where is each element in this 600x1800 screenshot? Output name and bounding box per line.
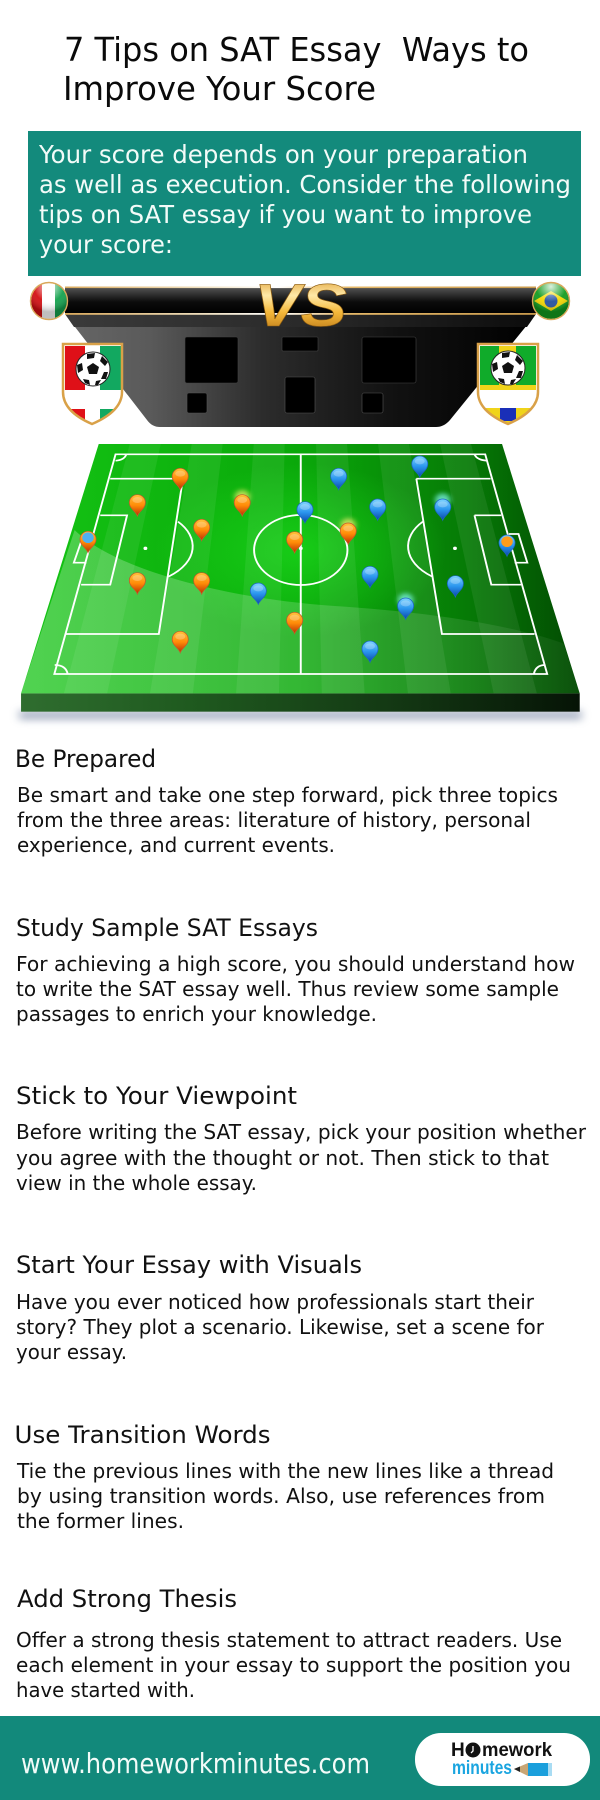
title: 7 Tips on SAT Essay Ways to (64, 30, 529, 69)
tip 6: Add Strong Thesis: each element in your essay to support the position you (16, 1653, 571, 1677)
tip 4: Start Your Essay with Visuals: your essay. (16, 1340, 127, 1364)
pin glows (235, 490, 450, 607)
intro panel: your score: (39, 230, 173, 259)
tip 2: Study Sample SAT Essays (16, 914, 575, 1026)
icon: Brazil shield (478, 344, 538, 426)
logo: Homework Minutes (415, 1733, 590, 1786)
tip 5: Use Transition Words: Tie the previous lines with the new lines like a thread (16, 1459, 554, 1483)
blue team pins (250, 456, 463, 662)
icon: Italy shield (63, 344, 122, 425)
tip 4: Start Your Essay with Visuals: Have you ever noticed how professionals start their (16, 1290, 535, 1314)
icon: Brazil flag (532, 282, 570, 320)
footer band (0, 1716, 600, 1800)
website address: www.homeworkminutes.com (21, 1747, 370, 1780)
title: Improve Your Score (63, 69, 376, 108)
tip 5: Use Transition Words (14, 1421, 554, 1533)
logo: Homework Minutes: mework (482, 1740, 552, 1761)
VS emblem: VS (254, 272, 347, 339)
tip 3: Stick to Your Viewpoint: you agree with the thought or not. Then stick to that (16, 1146, 549, 1170)
tip 6: Add Strong Thesis (16, 1585, 571, 1702)
orange team pins (129, 468, 356, 653)
tip 1: Be Prepared: Be Prepared (15, 745, 156, 773)
tip 5: Use Transition Words: Use Transition Words (14, 1421, 270, 1449)
pitch surface (21, 444, 580, 693)
tip 3: Stick to Your Viewpoint: Stick to Your Viewpoint (16, 1082, 297, 1110)
tip 5: Use Transition Words: the former lines. (17, 1509, 184, 1533)
tip 3: Stick to Your Viewpoint (16, 1082, 587, 1195)
tip 1: Be Prepared: from the three areas: literature of history, personal (17, 808, 531, 832)
title (63, 30, 529, 108)
intro panel: Your score depends on your preparation (38, 140, 528, 169)
pitch shadow (19, 709, 582, 721)
tip 2: Study Sample SAT Essays: to write the SAT essay well. Thus review some sample (16, 977, 559, 1001)
tip 3: Stick to Your Viewpoint: Before writing the SAT essay, pick your position whether (16, 1120, 587, 1144)
tip 4: Start Your Essay with Visuals: Start Your Essay with Visuals (16, 1251, 362, 1279)
tip 2: Study Sample SAT Essays: passages to enrich your knowledge. (16, 1002, 377, 1026)
top bar (65, 286, 536, 315)
intro panel (28, 131, 581, 276)
tip 4: Start Your Essay with Visuals (16, 1251, 545, 1364)
tip 1: Be Prepared: Be smart and take one step forward, pick three topics (17, 783, 558, 807)
intro panel: as well as execution. Consider the following (39, 170, 571, 199)
logo: Homework Minutes: o (467, 1740, 479, 1761)
goalkeeper pins (80, 531, 515, 556)
football pitch (14, 444, 586, 724)
logo: Homework Minutes: H (451, 1740, 465, 1761)
pitch markings (54, 454, 547, 674)
tip 2: Study Sample SAT Essays: For achieving a high score, you should understand how (16, 952, 575, 976)
intro panel: tips on SAT essay if you want to improve (39, 200, 532, 229)
tip 4: Start Your Essay with Visuals: story? They plot a scenario. Likewise, set a scene for (16, 1315, 545, 1339)
tip 6: Add Strong Thesis: have started with. (16, 1678, 195, 1702)
icon: Italy flag (30, 282, 69, 320)
tip 5: Use Transition Words: by using transition words. Also, use references from (17, 1484, 545, 1508)
tip 6: Add Strong Thesis: Offer a strong thesis statement to attract readers. Use (16, 1628, 562, 1652)
tip 6: Add Strong Thesis: Add Strong Thesis (17, 1585, 237, 1613)
logo: Homework Minutes: minutes (452, 1758, 512, 1779)
scoreboard body (65, 314, 536, 427)
scoreboard illustration (30, 272, 570, 427)
tip 3: Stick to Your Viewpoint: view in the whole essay. (16, 1171, 257, 1195)
pitch front face (21, 693, 580, 712)
tip 2: Study Sample SAT Essays: Study Sample SAT Essays (16, 914, 318, 942)
tip 1: Be Prepared: experience, and current events. (17, 833, 335, 857)
tip 1: Be Prepared (15, 745, 558, 857)
